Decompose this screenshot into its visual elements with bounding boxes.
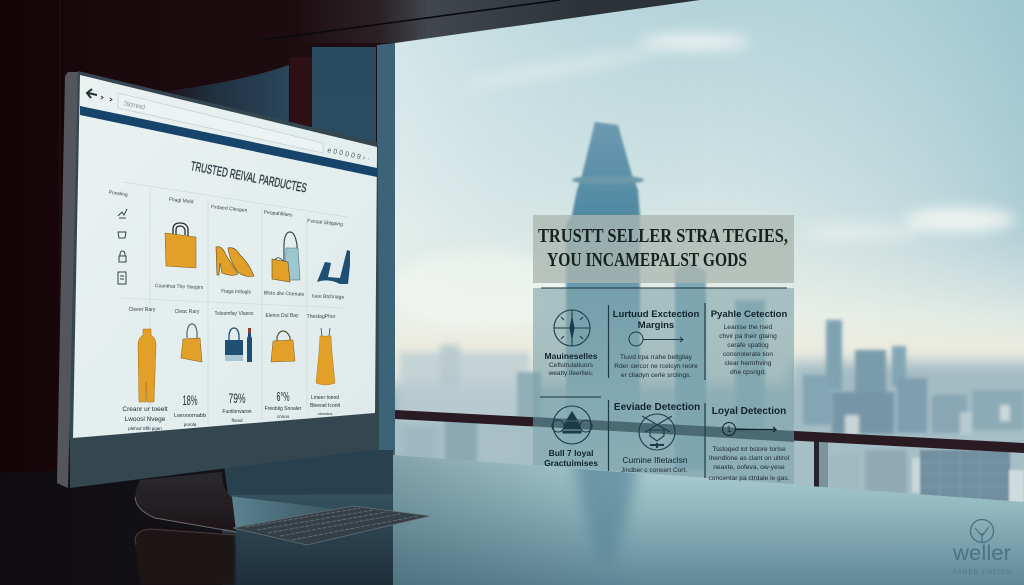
logo bbox=[952, 520, 1011, 576]
stat: 79%: 79% bbox=[228, 390, 246, 406]
stat: 79%: fhesd bbox=[231, 418, 243, 423]
card: evidence detection bbox=[614, 402, 700, 474]
blue panel bbox=[312, 47, 376, 467]
card: payable detection: chvir pa their gtaing bbox=[719, 333, 777, 340]
sidebar bbox=[108, 190, 128, 284]
sidebar icons bbox=[118, 209, 127, 284]
heading text bbox=[538, 226, 788, 271]
dress text: cleeolns bbox=[318, 411, 332, 416]
monitor body bbox=[68, 71, 379, 488]
stat: 60%: Freoblig Snoaler bbox=[265, 406, 302, 412]
card: loyal detection: cuncentar pa ctrdale le gas. bbox=[708, 475, 790, 482]
address bar bbox=[118, 93, 323, 153]
dress text: Lmeer toeed bbox=[311, 395, 339, 401]
card: compass bbox=[545, 310, 598, 377]
window sky bbox=[395, 0, 1024, 397]
stat: 60%: 6°% bbox=[276, 389, 290, 404]
icon: bag and tote bbox=[272, 232, 300, 282]
bottom row labels: Elenrs Dul Bay bbox=[265, 313, 299, 319]
top row labels: Fsnoal Shlpping bbox=[307, 218, 343, 228]
top row labels: Fhagl Mold bbox=[168, 197, 194, 205]
screen title: TRUSTED REIVAL PARDUCTES bbox=[189, 159, 308, 195]
jumpsuit text: plehsd Sflh pgan bbox=[128, 426, 162, 431]
icon: logo tree bbox=[970, 520, 994, 543]
stat: 60%: cnnoo bbox=[277, 414, 290, 419]
jumpsuit text bbox=[122, 406, 168, 431]
icon: yellow handbag bbox=[271, 331, 295, 362]
card: payable detection: Pyahle Cetection bbox=[711, 309, 787, 320]
card: loyal detection: Tsstoqed lot bstore torlse bbox=[712, 446, 786, 453]
top row captions: Fiaga Intlogls bbox=[221, 288, 251, 296]
desk bbox=[0, 455, 1024, 585]
top row captions: Bfsto dlw Ctomate bbox=[264, 290, 305, 298]
card: margins: Rder cercor ne rcelcyn reore bbox=[614, 363, 698, 370]
bottom row labels: ThestagPhor bbox=[307, 314, 336, 320]
railing bbox=[395, 410, 1024, 488]
top row labels bbox=[168, 197, 343, 228]
card: margins bbox=[613, 309, 699, 379]
product stats bbox=[122, 389, 341, 431]
icon: high heel bbox=[317, 250, 350, 284]
desk reflections bbox=[134, 450, 640, 585]
screen bbox=[73, 75, 377, 438]
card: loyal detection: neaxte, oofeva, ow-yese bbox=[713, 464, 785, 471]
card: margins: Tiuvd lrpa rrahe betlgliay bbox=[620, 354, 693, 361]
top row labels: Fxdaed Clesgen bbox=[211, 204, 248, 214]
heading text: YOU INCAMEPALST GODS bbox=[547, 250, 747, 271]
browser header band bbox=[80, 106, 377, 177]
card: loyal gratuities: Gractuimises bbox=[544, 458, 598, 468]
toolbar glyphs: e 0 0 0 0 9 › · bbox=[327, 147, 370, 163]
icon: stacked pyramid bbox=[552, 406, 592, 444]
card: margins: Margins bbox=[638, 320, 674, 331]
wall and ceiling bbox=[0, 0, 700, 480]
card: payable detection: Leanise the rsed bbox=[724, 324, 773, 331]
bottom row labels: Tolesmfay Vlasos bbox=[215, 311, 254, 317]
back wall panel bbox=[160, 65, 289, 140]
card: loyal detection: Ihendlone as clant on ultirol bbox=[709, 455, 790, 462]
blue column bbox=[377, 43, 395, 464]
stat: 79%: Fuotlonvaron bbox=[222, 409, 252, 415]
icon: shield crossed bbox=[639, 414, 675, 450]
card: compass: Mauineselles bbox=[545, 351, 598, 361]
top row captions: Iuee Btchnage bbox=[312, 293, 344, 301]
top row captions: Coanthat The Ssegirs bbox=[155, 283, 204, 291]
icon: numbered arrow: 1 bbox=[727, 425, 732, 434]
panel: heading bbox=[533, 215, 794, 283]
icon: dress bbox=[316, 328, 335, 385]
dress text bbox=[310, 395, 341, 416]
card: payable detection: consnolerate tion bbox=[723, 351, 773, 358]
logo: FARED ENTION bbox=[953, 569, 1011, 576]
top row labels: Peopahfilaes bbox=[263, 210, 293, 219]
monitor stand bbox=[135, 472, 345, 532]
address bar: Ssomesd bbox=[123, 100, 146, 112]
logo: weller bbox=[952, 542, 1011, 565]
card: compass: weatly ifeerlies. bbox=[547, 370, 594, 377]
bottom row labels bbox=[129, 307, 336, 320]
dress text: Bleeoel Iconlt bbox=[310, 403, 341, 409]
jumpsuit text: Creanr ur toeelt bbox=[122, 406, 168, 413]
city skyline bbox=[380, 300, 1024, 515]
icon: jumpsuit bbox=[138, 329, 156, 402]
stat: 18% bbox=[174, 392, 206, 427]
grid lines bbox=[120, 182, 347, 430]
stat: 79% bbox=[222, 390, 252, 423]
card: payable detection: clear hemrhving bbox=[725, 360, 772, 367]
top row captions bbox=[155, 283, 344, 301]
card: loyal detection: Loyal Detection bbox=[712, 406, 786, 417]
card: evidence detection: Eeviade Detection bbox=[614, 402, 700, 413]
stat: 18%: 18% bbox=[182, 392, 198, 408]
stat: 18%: Lwrooornabb bbox=[174, 413, 206, 419]
card: payable detection: cerafe spatiog bbox=[727, 342, 769, 349]
card: evidence detection: Cumine Ifietaclsn bbox=[622, 455, 688, 465]
icon: shoes bbox=[216, 247, 254, 276]
heading text: TRUSTT SELLER STRA TEGIES, bbox=[538, 226, 788, 247]
stat: 60% bbox=[265, 389, 302, 419]
card: loyal detection bbox=[708, 406, 790, 482]
icon: tote bag bbox=[165, 223, 196, 268]
card: loyal gratuities bbox=[544, 406, 598, 468]
tower bbox=[566, 122, 706, 470]
panel: strategies bbox=[533, 288, 794, 484]
jumpsuit text: Lwoosl Nvege bbox=[125, 416, 166, 423]
back arrow icon bbox=[87, 89, 112, 101]
card: payable detection: dhe cpsrigd. bbox=[730, 369, 766, 376]
bottom row labels: Cleeer Rary bbox=[129, 307, 156, 313]
stat: 18%: porola bbox=[184, 422, 197, 427]
card: loyal gratuities: Bull 7 loyal bbox=[549, 448, 593, 458]
icon: orange handbag bbox=[181, 324, 202, 362]
icon: circle arrow bbox=[629, 332, 683, 346]
icon: navy bag and bottle bbox=[225, 328, 252, 362]
sidebar label: Ponsling bbox=[108, 190, 128, 198]
monitor bbox=[57, 71, 430, 545]
card: evidence detection: Jindber c consert Cort. bbox=[621, 467, 687, 474]
card: margins: er cliadyn cerle srclings. bbox=[621, 372, 691, 379]
bottom row labels: Cleac Rary bbox=[175, 309, 200, 315]
clouds bbox=[390, 34, 1015, 330]
icon: compass bbox=[554, 310, 590, 346]
dark pillar bbox=[290, 57, 312, 142]
card: payable detection bbox=[711, 309, 787, 376]
card: compass: Ceflstrulatiuors bbox=[549, 362, 594, 369]
keyboard bbox=[233, 506, 430, 545]
card: margins: Lurtuud Exctection bbox=[613, 309, 699, 320]
